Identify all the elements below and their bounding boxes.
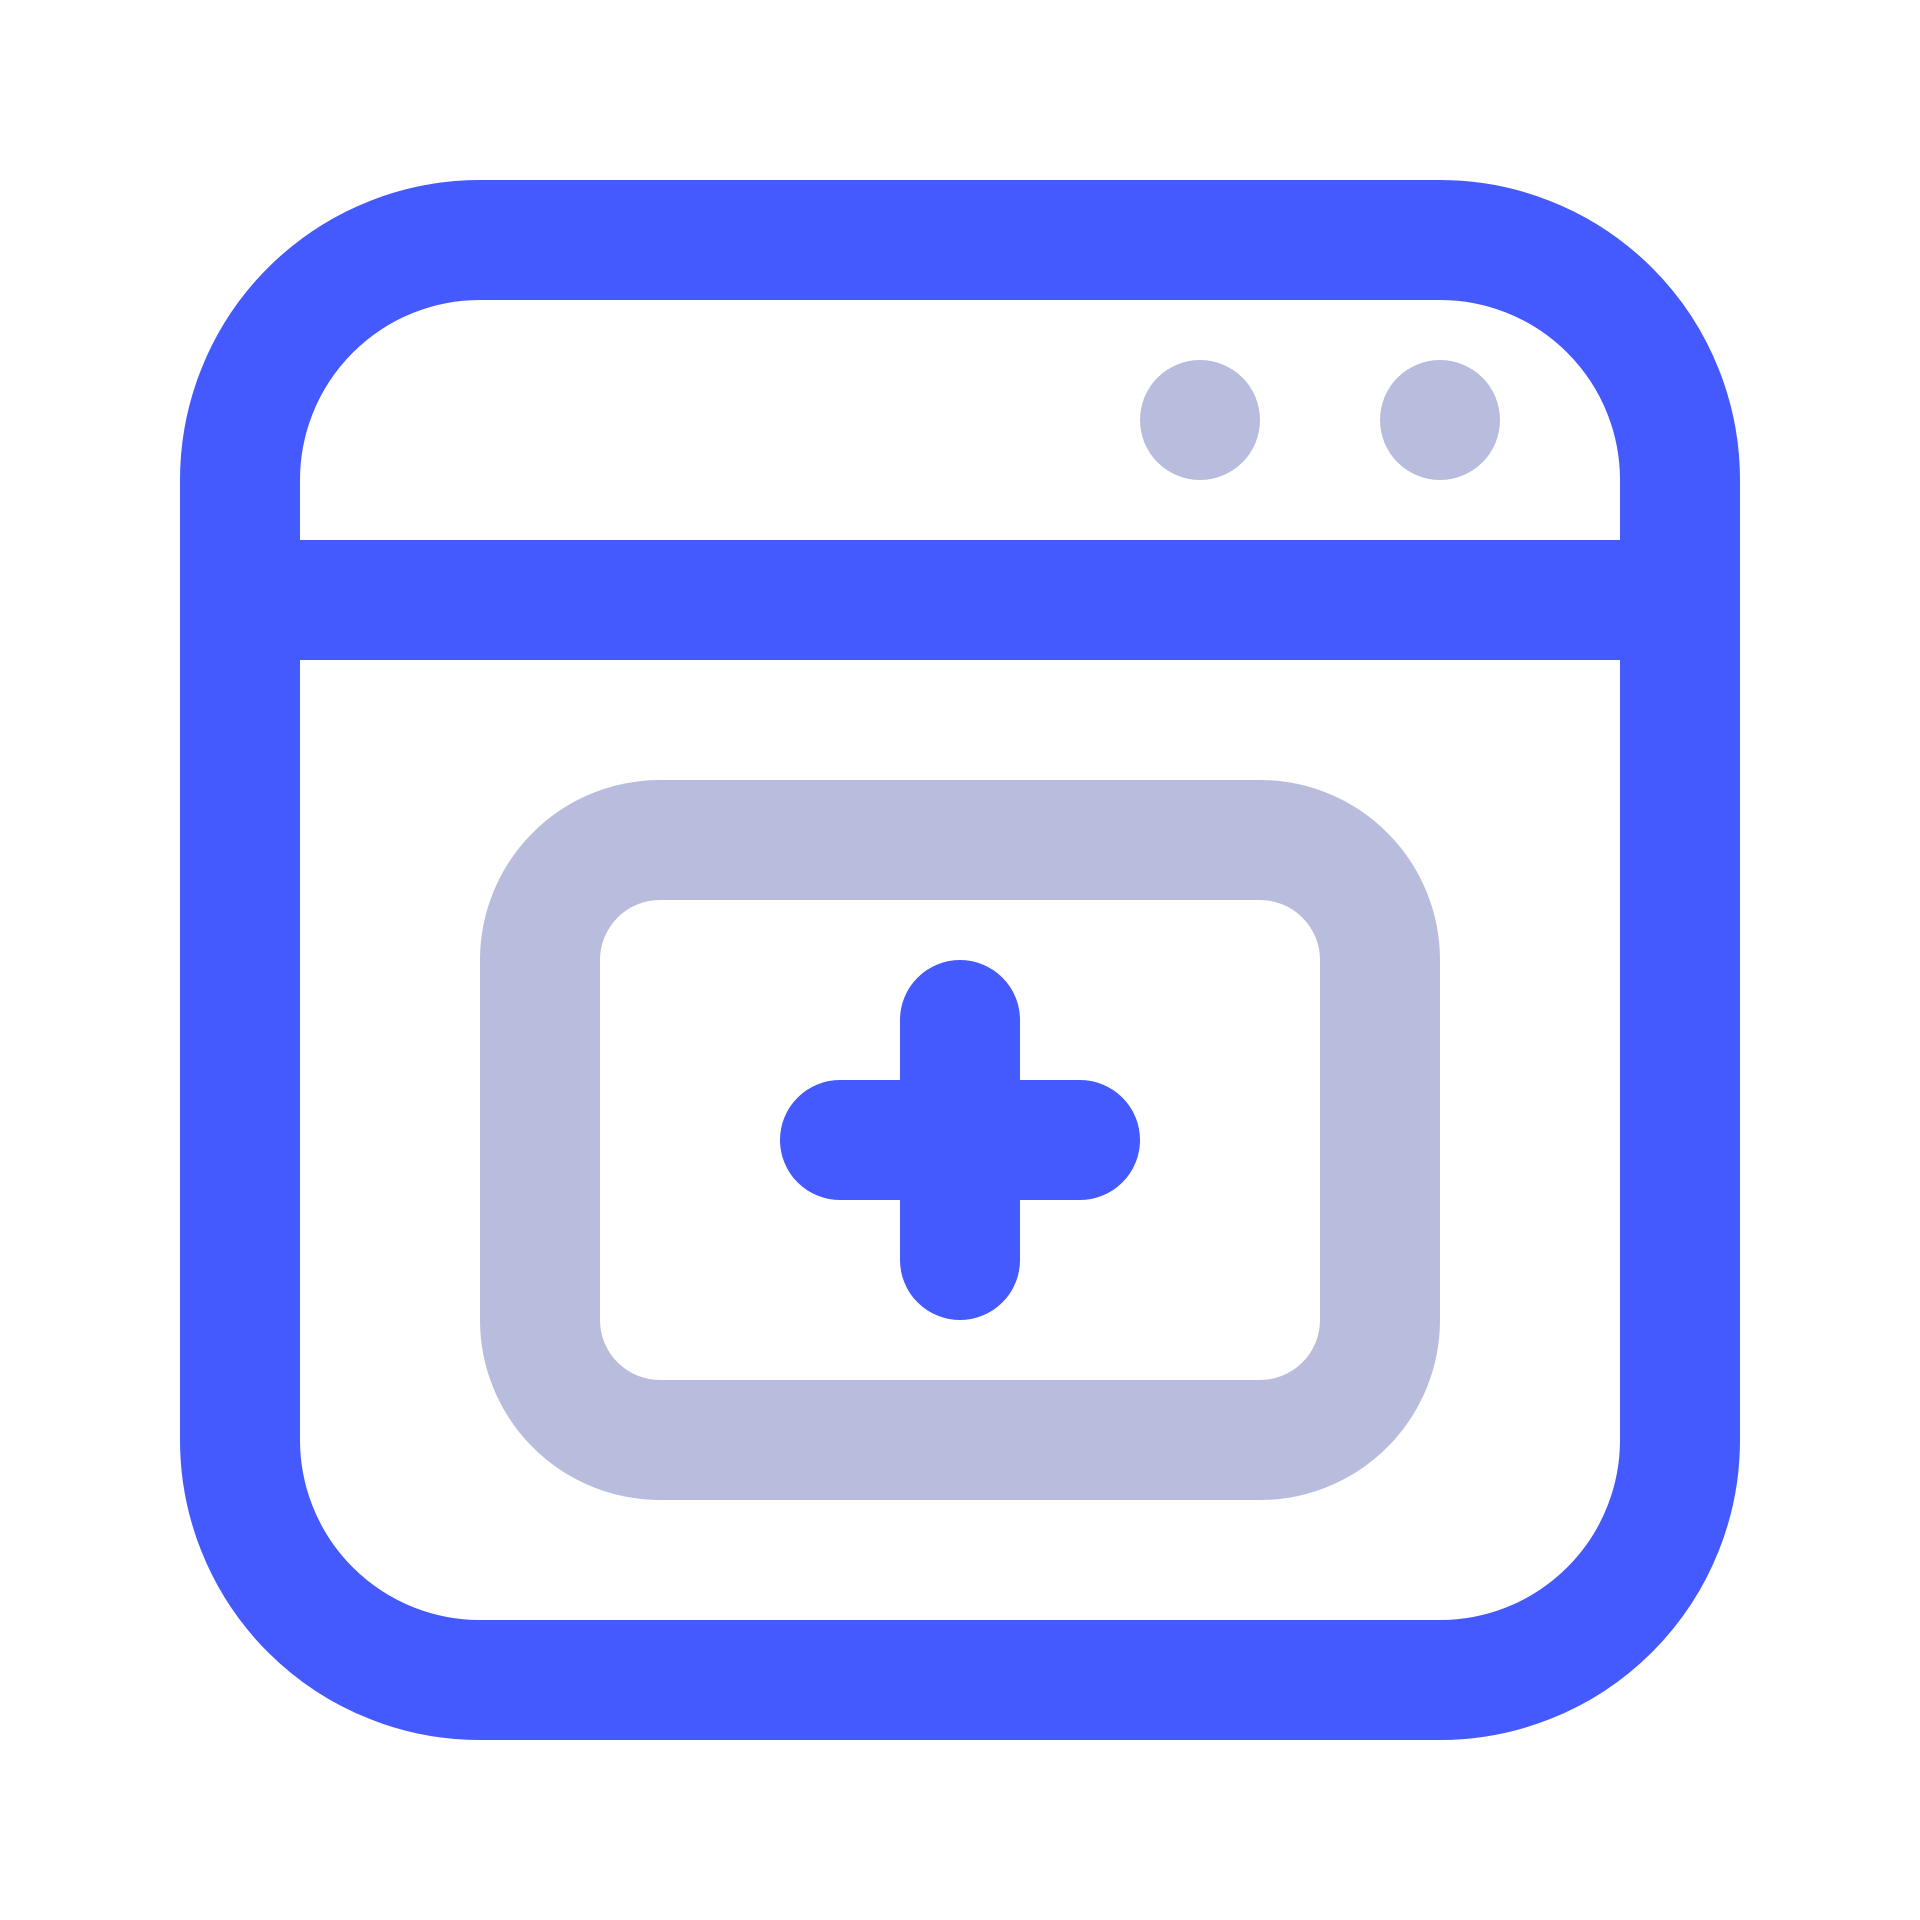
icon: inner rounded panel — [540, 840, 1380, 1440]
icon: window control dots — [1140, 360, 1500, 480]
icon: browser window frame — [240, 240, 1680, 1680]
icon: plus sign — [840, 1020, 1080, 1260]
